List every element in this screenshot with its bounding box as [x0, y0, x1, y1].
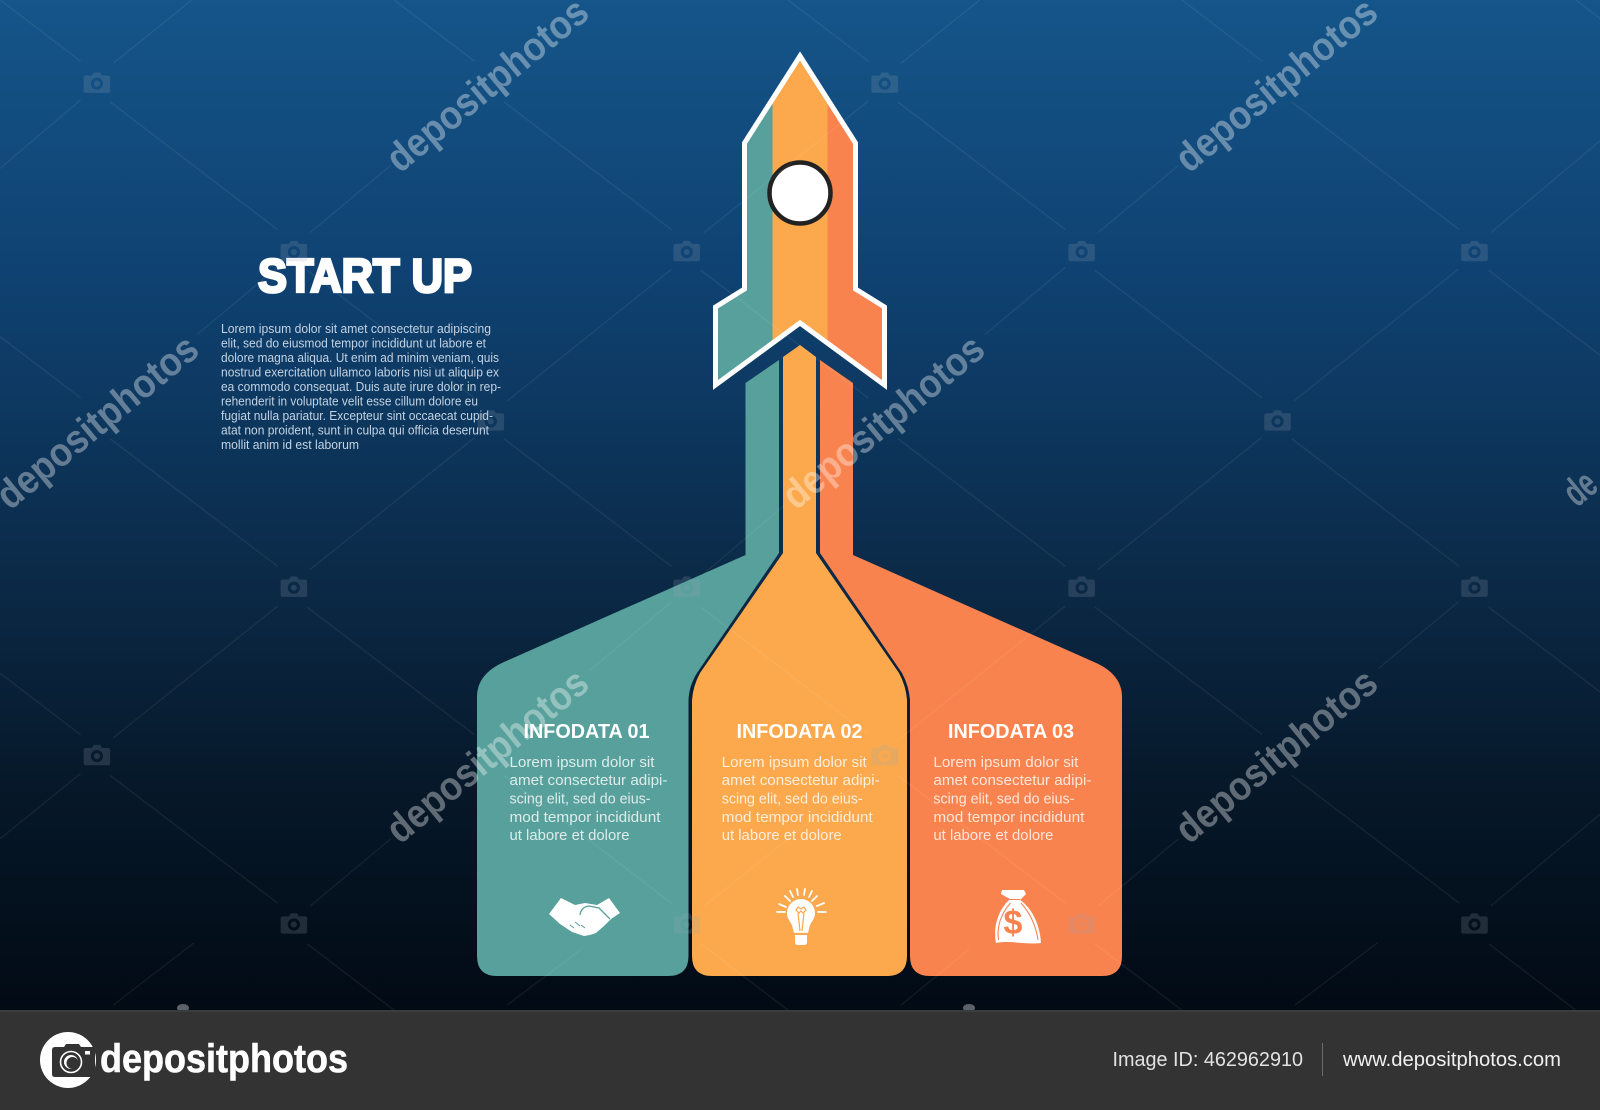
heading 03: INFODATA 03 [948, 720, 1074, 743]
panel: infodata 02 orange [692, 345, 907, 976]
body text 02: amet consectetur adipi- [722, 772, 880, 789]
body text 02: scing elit, sed do eius- [722, 790, 863, 808]
panel: infodata 03 coral [820, 360, 1122, 976]
watermark overlay: depositphotos [378, 660, 597, 852]
text block: intro paragraph: nostrud exercitation ullamco laboris nisi ut aliquip ex [221, 366, 500, 380]
orange flame shape [692, 345, 907, 976]
rocket body stripes [718, 60, 882, 380]
heading: START UP: START UP [258, 249, 472, 302]
icon: handshake [549, 898, 620, 936]
body text 02 [722, 754, 880, 844]
body text 01: Lorem ipsum dolor sit [510, 754, 655, 771]
body text 02: mod tempor incididunt [722, 809, 874, 826]
icon: money bag [995, 890, 1041, 943]
footer image id: Image ID: 462962910 [1112, 1049, 1303, 1071]
watermark overlay: depositphotos [774, 326, 993, 518]
rocket outline [716, 56, 884, 385]
icon: footer camera logo [40, 1032, 96, 1088]
heading 01: INFODATA 01 [524, 720, 650, 743]
body text 02: Lorem ipsum dolor sit [722, 754, 868, 771]
body text 03: amet consectetur adipi- [933, 772, 1091, 789]
text block: intro paragraph: fugiat nulla pariatur. Excepteur sint occaecat cupid- [221, 409, 493, 423]
coral flame shape [820, 360, 1122, 976]
body text 03: ut labore et dolore [933, 827, 1053, 844]
body text 01 [510, 754, 668, 844]
icon: light bulb [777, 889, 826, 945]
body text 03 [933, 754, 1091, 844]
text block: intro paragraph: dolore magna aliqua. Ut enim ad minim veniam, quis [221, 351, 499, 365]
body text 01: amet consectetur adipi- [510, 772, 668, 789]
text block: intro paragraph: elit, sed do eiusmod tempor incididunt ut labore et [221, 336, 486, 350]
rocket window [770, 162, 830, 224]
body text 01: ut labore et dolore [510, 827, 630, 844]
icon: money bag: $ [1004, 904, 1023, 942]
text block: intro paragraph: Lorem ipsum dolor sit amet consectetur adipiscing [221, 322, 491, 336]
heading 02: INFODATA 02 [736, 720, 862, 743]
text block: intro paragraph: atat non proident, sunt in culpa qui officia deserunt [221, 424, 489, 438]
body text 03: scing elit, sed do eius- [933, 790, 1074, 808]
body text 01: mod tempor incididunt [510, 809, 661, 826]
body text 03: mod tempor incididunt [933, 809, 1085, 826]
body text 02: ut labore et dolore [722, 827, 842, 844]
text block: intro paragraph: mollit anim id est laborum [221, 438, 359, 452]
footer wordmark: depositphotos [100, 1037, 348, 1081]
text block: intro paragraph: ea commodo consequat. Duis aute irure dolor in rep- [221, 380, 501, 394]
text block: intro paragraph [221, 322, 501, 452]
rocket [713, 52, 887, 390]
teal flame shape [477, 360, 779, 976]
watermark overlay: depositphotos [1167, 660, 1386, 852]
body text 03: Lorem ipsum dolor sit [933, 754, 1079, 771]
footer url: www.depositphotos.com [1342, 1049, 1561, 1071]
body text 01: scing elit, sed do eius- [510, 790, 650, 808]
panel: infodata 01 teal [477, 360, 779, 976]
footer bar [0, 1010, 1600, 1110]
text block: intro paragraph: rehenderit in voluptate velit esse cillum dolore eu [221, 394, 478, 408]
